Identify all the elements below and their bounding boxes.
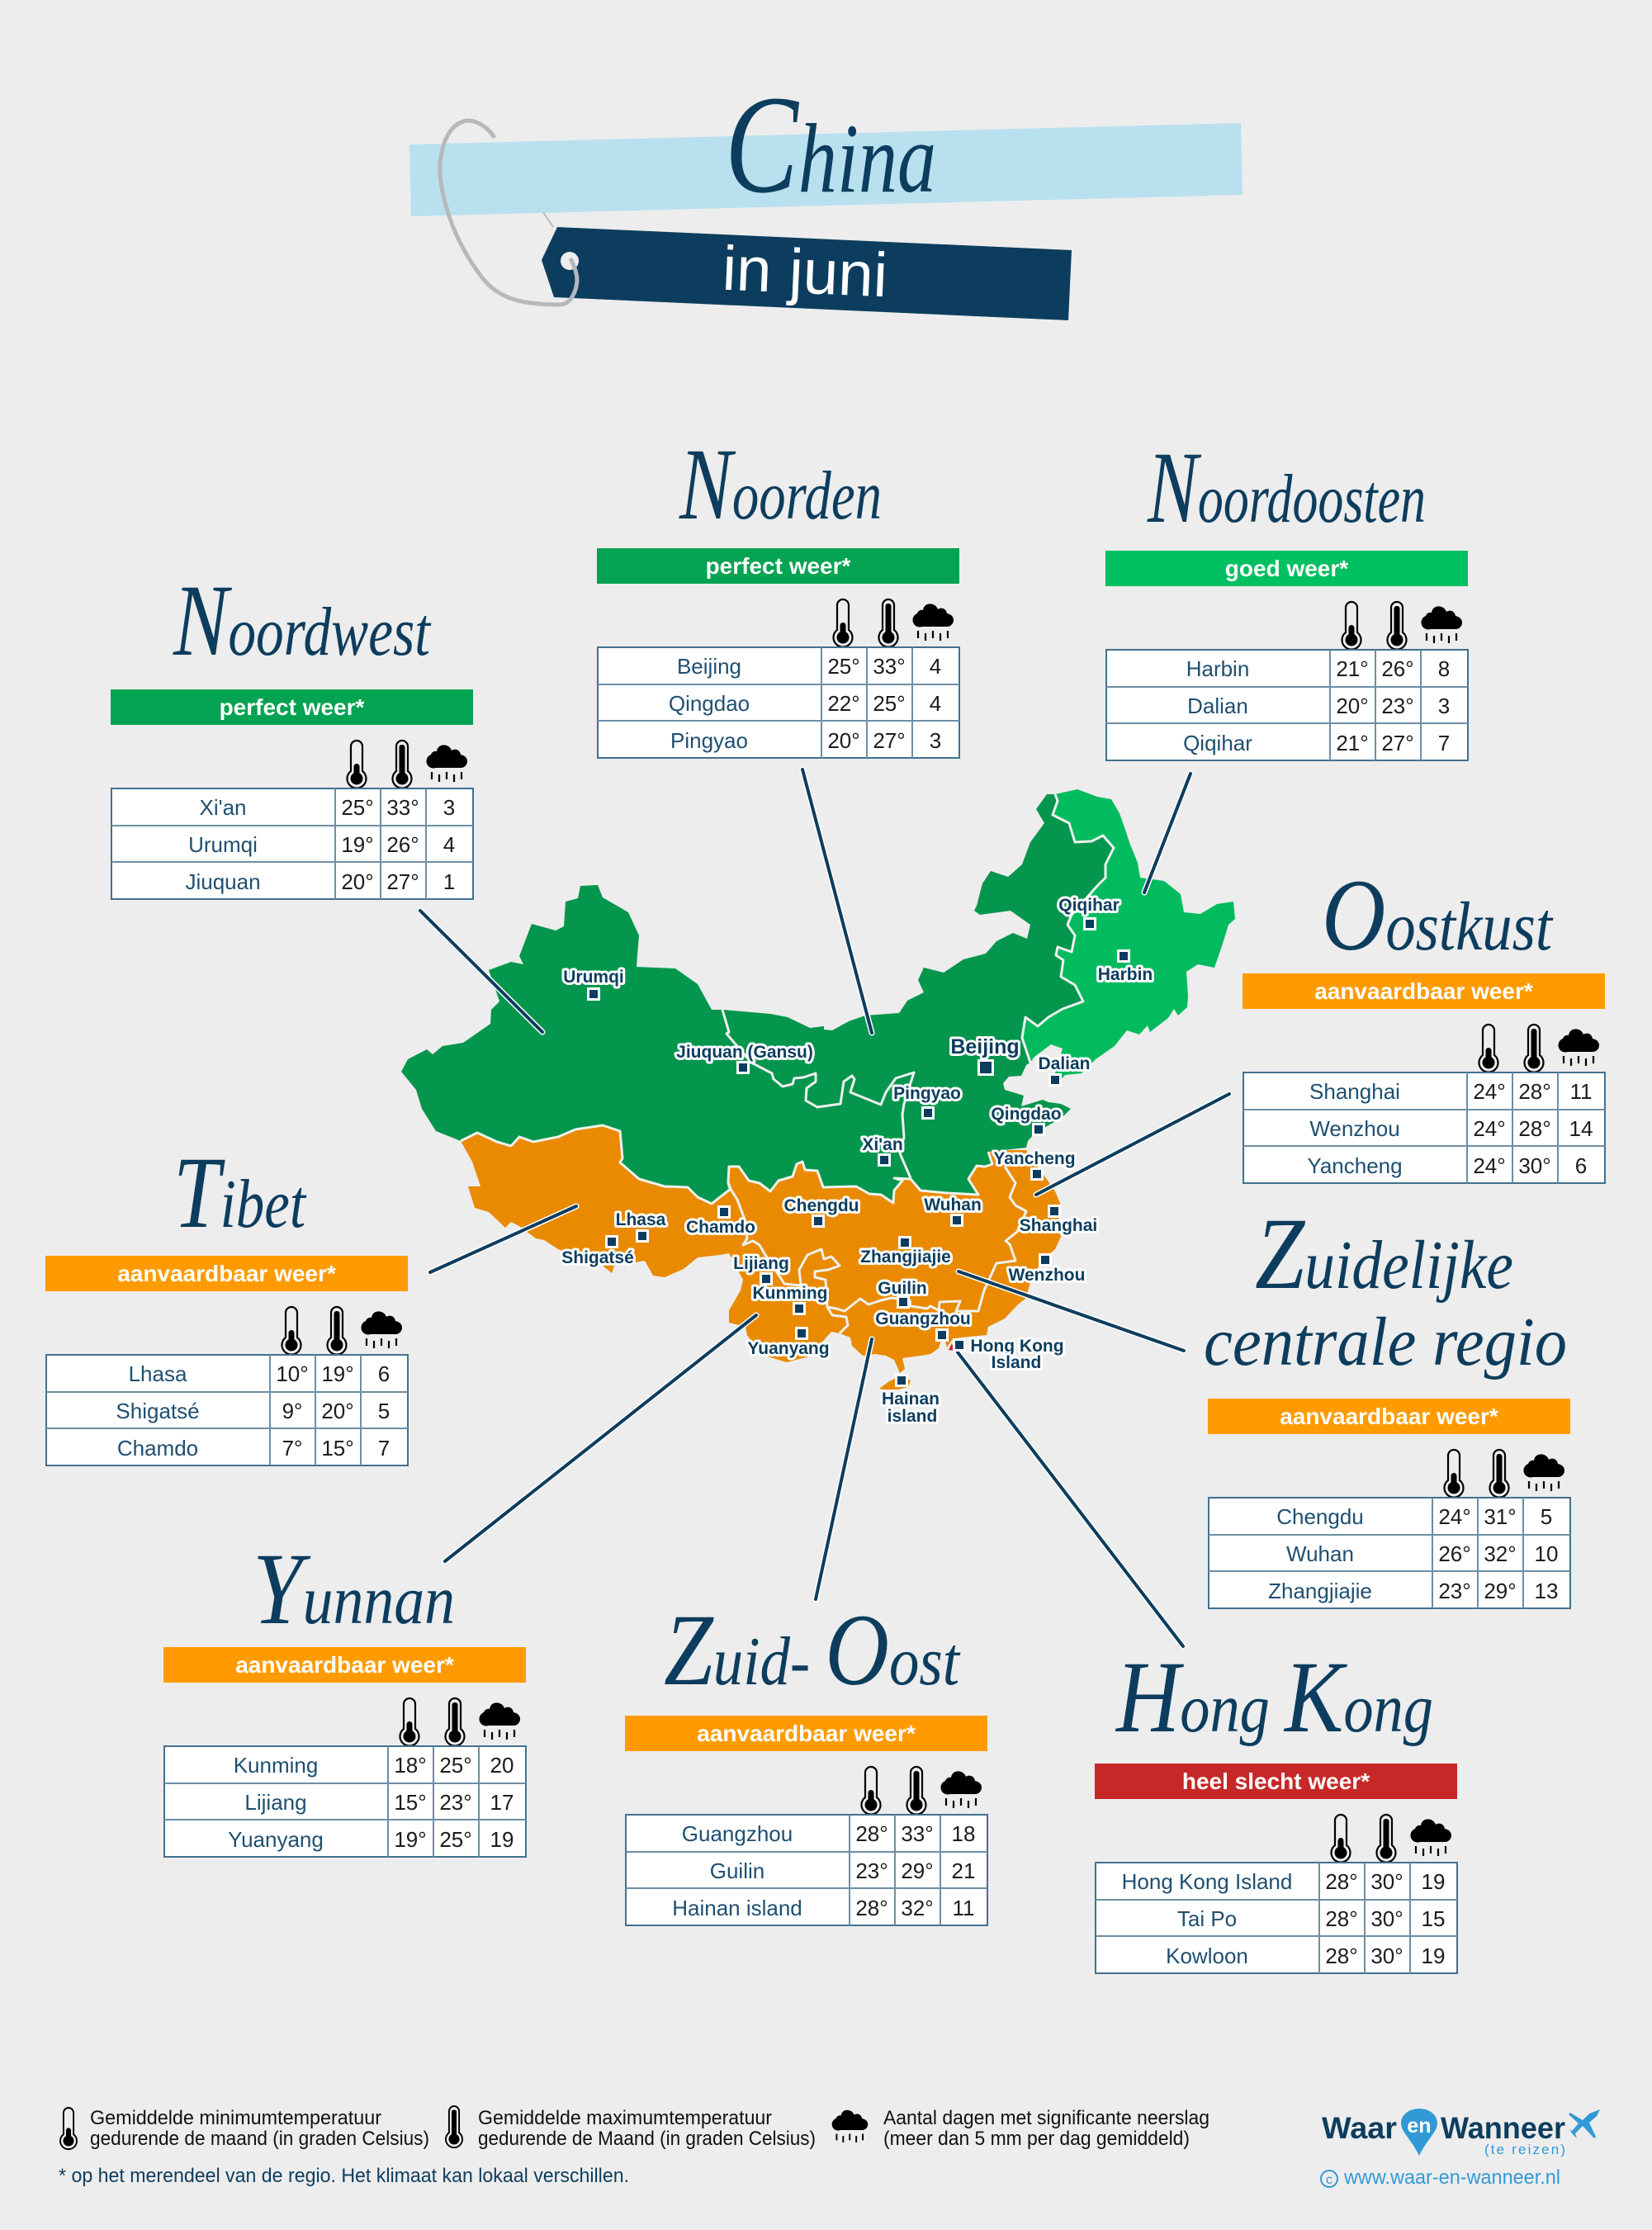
rating banner: aanvaardbaar weer* <box>1314 978 1533 1004</box>
icon: map pin <box>1401 2109 1437 2156</box>
icons <box>400 1698 520 1746</box>
region borders <box>461 794 1114 1333</box>
city: Guangzhou <box>875 1309 971 1342</box>
city: Guilin: Guilin <box>878 1279 927 1298</box>
heading: Zuidelijke <box>1255 1197 1513 1310</box>
legend: maximum temperature <box>446 2106 816 2150</box>
city: Zhangjiajie <box>860 1236 951 1267</box>
table: 26° <box>1438 1541 1471 1566</box>
table: 30° <box>1370 1906 1403 1931</box>
table: 8 <box>1438 656 1450 681</box>
table: 17 <box>490 1790 514 1815</box>
icon: plane <box>1569 2109 1600 2138</box>
city: Jiuquan <box>676 1043 813 1074</box>
logo word: Wanneer: Wanneer <box>1441 2111 1565 2145</box>
table: 25° <box>827 654 860 679</box>
table: 23° <box>855 1858 888 1883</box>
table <box>111 788 473 899</box>
table: Tai Po <box>1177 1906 1237 1931</box>
website: c <box>1326 2173 1332 2187</box>
table: 10° <box>276 1361 309 1386</box>
table: 18° <box>394 1753 427 1778</box>
table <box>164 1746 526 1857</box>
table: Dalian <box>1187 694 1248 718</box>
table: Urumqi <box>188 832 258 857</box>
title <box>409 67 1243 320</box>
table: Shigatsé <box>116 1399 200 1423</box>
table: 9° <box>282 1399 302 1423</box>
table: Yuanyang <box>228 1827 324 1852</box>
rating banner: heel slecht weer* <box>1182 1768 1370 1794</box>
table block <box>625 1716 987 1925</box>
table: 10 <box>1535 1541 1558 1566</box>
table: 28° <box>1518 1079 1551 1104</box>
tag string <box>543 212 553 227</box>
rating banner <box>597 548 959 584</box>
city: Hong Kong Island <box>953 1337 1064 1372</box>
city: Qiqihar <box>1058 896 1119 930</box>
table: 28° <box>855 1896 888 1920</box>
leader line: Zuid-Oost <box>816 1339 872 1599</box>
table: Wenzhou <box>1309 1116 1400 1141</box>
table: 25° <box>873 691 906 716</box>
table: 24° <box>1473 1153 1506 1178</box>
city: Shanghai <box>1020 1205 1097 1235</box>
icons <box>862 1767 982 1815</box>
city: Yuanyang <box>747 1327 830 1358</box>
city: Pingyao: Pingyao <box>893 1084 961 1103</box>
city: Guangzhou: Guangzhou <box>875 1309 971 1328</box>
heading: Hong Kong <box>1115 1641 1433 1754</box>
city: Lijiang <box>733 1254 789 1285</box>
table: Guangzhou <box>682 1821 793 1846</box>
panel: Noordwest <box>111 564 473 899</box>
panel: Yunnan <box>163 1532 526 1857</box>
table: 4 <box>443 832 455 857</box>
rating banner <box>163 1647 526 1683</box>
city: Kunming: Kunming <box>753 1284 827 1303</box>
table: 3 <box>1438 694 1450 718</box>
table: 3 <box>930 728 941 753</box>
leader line: Oostkust <box>1036 1094 1229 1195</box>
icons <box>1479 1025 1599 1072</box>
tag hole <box>561 252 579 270</box>
table: 28° <box>1325 1906 1358 1931</box>
legend: minimum temperature: Gemiddelde minimumtemperatuur <box>90 2107 381 2129</box>
icons <box>1342 602 1462 650</box>
heading: Noordoosten <box>1147 431 1426 544</box>
table: 27° <box>1381 731 1414 755</box>
city: Chengdu: Chengdu <box>784 1196 859 1215</box>
city: Qiqihar: Qiqihar <box>1058 896 1119 915</box>
city: Urumqi: Urumqi <box>563 968 624 987</box>
leader line: Noordoosten <box>1144 774 1190 892</box>
table: Hong Kong Island <box>1122 1869 1292 1894</box>
table <box>626 1815 987 1925</box>
subtitle: in juni <box>721 234 889 310</box>
table: 4 <box>930 654 941 679</box>
table: 18 <box>952 1821 975 1846</box>
city: Xi'an <box>862 1135 903 1167</box>
table: Qiqihar <box>1183 731 1252 755</box>
table block <box>111 689 473 899</box>
rating banner <box>1208 1399 1570 1434</box>
table block <box>1243 973 1605 1183</box>
city: Chamdo: Chamdo <box>686 1218 755 1237</box>
leader line: Hong Kong <box>958 1352 1183 1646</box>
table: 21° <box>1336 731 1369 755</box>
table block <box>1095 1764 1457 1973</box>
heading: Zuid- Oost <box>664 1593 961 1707</box>
table: 13 <box>1535 1579 1558 1603</box>
city: Zhangjiajie: Zhangjiajie <box>860 1248 951 1267</box>
rating banner <box>1243 973 1605 1009</box>
table: 15° <box>321 1436 354 1461</box>
table: 19° <box>341 832 374 857</box>
city: Shigatsé <box>561 1235 634 1267</box>
table: 28° <box>855 1821 888 1846</box>
panel: Zuidelijke centrale regio <box>1204 1197 1570 1608</box>
legend: precipitation: Aantal dagen met significante neerslag <box>883 2107 1209 2129</box>
table <box>1106 650 1468 760</box>
table: 23° <box>439 1790 472 1815</box>
rating banner: aanvaardbaar weer* <box>1280 1404 1498 1429</box>
region: Hainan <box>879 1376 911 1390</box>
table: Yancheng <box>1307 1153 1403 1178</box>
icons <box>1445 1450 1564 1498</box>
city: Wenzhou <box>1009 1253 1085 1285</box>
table: 20° <box>321 1399 354 1423</box>
city: Dalian: Dalian <box>1038 1054 1091 1073</box>
table: 19° <box>394 1827 427 1852</box>
rating banner: perfect weer* <box>706 553 851 579</box>
leader line: Noordwest <box>420 911 542 1032</box>
table: Zhangjiajie <box>1268 1579 1372 1603</box>
table: 25° <box>341 795 374 820</box>
city: Xi'an: Xi'an <box>862 1135 903 1154</box>
table: Chengdu <box>1276 1504 1364 1529</box>
table: 15 <box>1422 1906 1445 1931</box>
leader line: Yunnan <box>445 1315 756 1561</box>
heading: Yunnan <box>253 1532 455 1645</box>
city: Lhasa <box>616 1210 666 1243</box>
table: 5 <box>1541 1504 1552 1529</box>
table: Lijiang <box>244 1790 307 1815</box>
leader line: Tibet <box>430 1206 576 1272</box>
table: 30° <box>1518 1153 1551 1178</box>
table: 33° <box>873 654 906 679</box>
city: Chamdo <box>686 1205 755 1237</box>
table: 23° <box>1381 694 1414 718</box>
city: Harbin <box>1098 949 1153 984</box>
table: Shanghai <box>1309 1079 1400 1104</box>
title: China: China <box>725 67 936 222</box>
panel: Hong Kong <box>1095 1641 1457 1973</box>
table: 1 <box>443 869 455 894</box>
table: Jiuquan <box>185 869 261 894</box>
legend: maximum temperature: Gemiddelde maximumtemperatuur <box>478 2107 772 2129</box>
table: 26° <box>1381 656 1414 681</box>
icons <box>282 1307 402 1355</box>
region: Hong Kong <box>949 1343 954 1351</box>
table: 15° <box>394 1790 427 1815</box>
loop <box>440 121 577 305</box>
table: 19° <box>321 1361 354 1386</box>
legend: precipitation: (meer dan 5 mm per dag gemiddeld) <box>883 2128 1190 2150</box>
table: Xi'an <box>199 795 247 820</box>
panel: Noordoosten <box>1105 431 1468 760</box>
city: Hainan island: island <box>888 1407 937 1426</box>
city: Lijiang: Lijiang <box>733 1254 789 1273</box>
heading <box>1204 1197 1567 1380</box>
table: 33° <box>901 1821 934 1846</box>
table: 28° <box>1325 1869 1358 1894</box>
rating banner: goed weer* <box>1225 556 1348 581</box>
city: Dalian <box>1038 1054 1091 1087</box>
legend: precipitation <box>832 2107 1209 2150</box>
table: 23° <box>1438 1579 1471 1603</box>
table: 30° <box>1370 1869 1403 1894</box>
city: Jiuquan: Jiuquan (Gansu) <box>676 1043 813 1062</box>
city: Shigatsé: Shigatsé <box>561 1248 634 1267</box>
table: 11 <box>1570 1079 1592 1104</box>
city: Yancheng <box>993 1149 1076 1181</box>
table block <box>597 548 959 758</box>
table: 6 <box>1575 1153 1587 1178</box>
region: north and northwest (green) <box>401 794 1114 1204</box>
heading: Noorden <box>679 428 882 541</box>
city: Qingdao: Qingdao <box>991 1105 1062 1124</box>
heading: centrale regio <box>1204 1304 1567 1380</box>
table: 22° <box>827 691 860 716</box>
table <box>1096 1863 1457 1973</box>
table: 7 <box>1438 731 1450 755</box>
city: Yuanyang: Yuanyang <box>747 1339 830 1358</box>
table: 27° <box>386 869 419 894</box>
panel: Oostkust <box>1243 859 1605 1183</box>
table: Guilin <box>710 1858 764 1883</box>
table block <box>45 1256 408 1465</box>
table: 28° <box>1325 1944 1358 1968</box>
table: Wuhan <box>1286 1541 1354 1566</box>
city: Wenzhou: Wenzhou <box>1009 1266 1085 1285</box>
footnote: * op het merendeel van de regio. Het klimaat kan lokaal verschillen. <box>59 2165 629 2187</box>
legend <box>59 2106 1209 2187</box>
table: 21° <box>1336 656 1369 681</box>
rating banner: aanvaardbaar weer* <box>117 1261 336 1286</box>
region: south (orange) <box>461 1115 1061 1373</box>
table: 20° <box>827 728 860 753</box>
table: 25° <box>439 1827 472 1852</box>
rating banner: perfect weer* <box>220 694 365 720</box>
leader line: Noorden <box>802 769 872 1033</box>
city: Wuhan <box>924 1195 982 1227</box>
table: 25° <box>439 1753 472 1778</box>
tag <box>542 227 1072 320</box>
heading: Tibet <box>173 1136 307 1249</box>
heading: Oostkust <box>1322 859 1554 972</box>
table: 19 <box>490 1827 514 1852</box>
website: www.waar-en-wanneer.nl <box>1343 2166 1560 2189</box>
table: Kunming <box>234 1753 318 1778</box>
panel: Zuid-Oost <box>625 1593 987 1925</box>
table: 24° <box>1473 1079 1506 1104</box>
map of China <box>401 789 1235 1390</box>
leader line: Zuidelijke centrale regio <box>959 1271 1184 1351</box>
city: Beijing: Beijing <box>950 1035 1020 1058</box>
table: 32° <box>901 1896 934 1920</box>
table: 7 <box>378 1436 390 1461</box>
rating banner <box>625 1716 987 1751</box>
table block <box>1105 551 1468 760</box>
legend: minimum temperature <box>60 2107 429 2150</box>
table: 6 <box>378 1361 390 1386</box>
region: northeast (light green) <box>1022 789 1235 1084</box>
rating banner <box>1095 1764 1457 1799</box>
table: 30° <box>1370 1944 1403 1968</box>
icons <box>347 741 467 788</box>
table: Qingdao <box>669 691 750 716</box>
table: 20 <box>490 1753 514 1778</box>
title band <box>409 123 1243 216</box>
table: 29° <box>901 1858 934 1883</box>
rating banner: aanvaardbaar weer* <box>235 1652 454 1678</box>
legend: minimum temperature: gedurende de maand (in graden Celsius) <box>90 2128 429 2150</box>
table: 21 <box>952 1858 975 1883</box>
table: 14 <box>1569 1116 1593 1141</box>
panel: Tibet <box>45 1136 408 1465</box>
table: 5 <box>378 1399 390 1423</box>
city: Lhasa: Lhasa <box>616 1210 666 1229</box>
city: Wuhan: Wuhan <box>924 1195 982 1214</box>
table: 20° <box>341 869 374 894</box>
table: 24° <box>1438 1504 1471 1529</box>
table: Chamdo <box>117 1436 198 1461</box>
table: 31° <box>1484 1504 1517 1529</box>
city: Beijing <box>950 1035 1020 1076</box>
table: 4 <box>930 691 941 716</box>
logo tagline: (te reizen) <box>1484 2142 1565 2157</box>
table <box>1243 1072 1605 1183</box>
table: 7° <box>282 1436 302 1461</box>
table: 11 <box>953 1896 974 1920</box>
city: Harbin: Harbin <box>1098 965 1153 984</box>
table: 19 <box>1422 1869 1445 1894</box>
table: Pingyao <box>670 728 748 753</box>
city: Shanghai: Shanghai <box>1020 1216 1097 1235</box>
city: Hong Kong Island: Island <box>992 1353 1041 1372</box>
city: Hong Kong Island: Hong Kong <box>970 1337 1064 1356</box>
city: Chengdu <box>784 1196 859 1228</box>
table block <box>163 1647 526 1857</box>
city: Guilin <box>878 1279 927 1309</box>
table: 24° <box>1473 1116 1506 1141</box>
table: 28° <box>1518 1116 1551 1141</box>
logo word: en: en <box>1407 2114 1432 2138</box>
heading: Noordwest <box>173 564 432 677</box>
city: Hainan island <box>882 1374 940 1426</box>
table <box>46 1355 408 1465</box>
logo: Waar en Wanneer <box>1321 2109 1600 2189</box>
table: Beijing <box>677 654 741 679</box>
table: 27° <box>873 728 906 753</box>
city: Yancheng: Yancheng <box>993 1149 1076 1168</box>
table: 19 <box>1422 1944 1445 1968</box>
table block <box>1208 1399 1570 1608</box>
table: 32° <box>1484 1541 1517 1566</box>
table: Lhasa <box>129 1361 187 1386</box>
city: Urumqi <box>563 968 624 1001</box>
table: 29° <box>1484 1579 1517 1603</box>
table: 3 <box>443 795 455 820</box>
rating banner <box>111 689 473 725</box>
rating banner: aanvaardbaar weer* <box>697 1721 916 1746</box>
logo word: Waar: Waar <box>1322 2111 1397 2145</box>
city: Qingdao <box>991 1105 1062 1136</box>
legend: maximum temperature: gedurende de Maand (in graden Celsius) <box>478 2128 816 2150</box>
table: 33° <box>386 795 419 820</box>
table: Hainan island <box>672 1896 802 1920</box>
icons <box>1331 1815 1451 1863</box>
city: Pingyao <box>893 1084 961 1120</box>
city: Kunming <box>753 1284 827 1315</box>
rating banner <box>45 1256 408 1291</box>
city: Hainan island: Hainan <box>882 1390 940 1409</box>
table <box>1209 1498 1570 1608</box>
icons <box>834 599 954 647</box>
table <box>598 647 959 758</box>
table: 26° <box>386 832 419 857</box>
table: 20° <box>1336 694 1369 718</box>
table: Kowloon <box>1166 1944 1248 1968</box>
rating banner <box>1105 551 1468 586</box>
panel: Noorden <box>597 428 959 758</box>
table: Harbin <box>1186 656 1249 681</box>
